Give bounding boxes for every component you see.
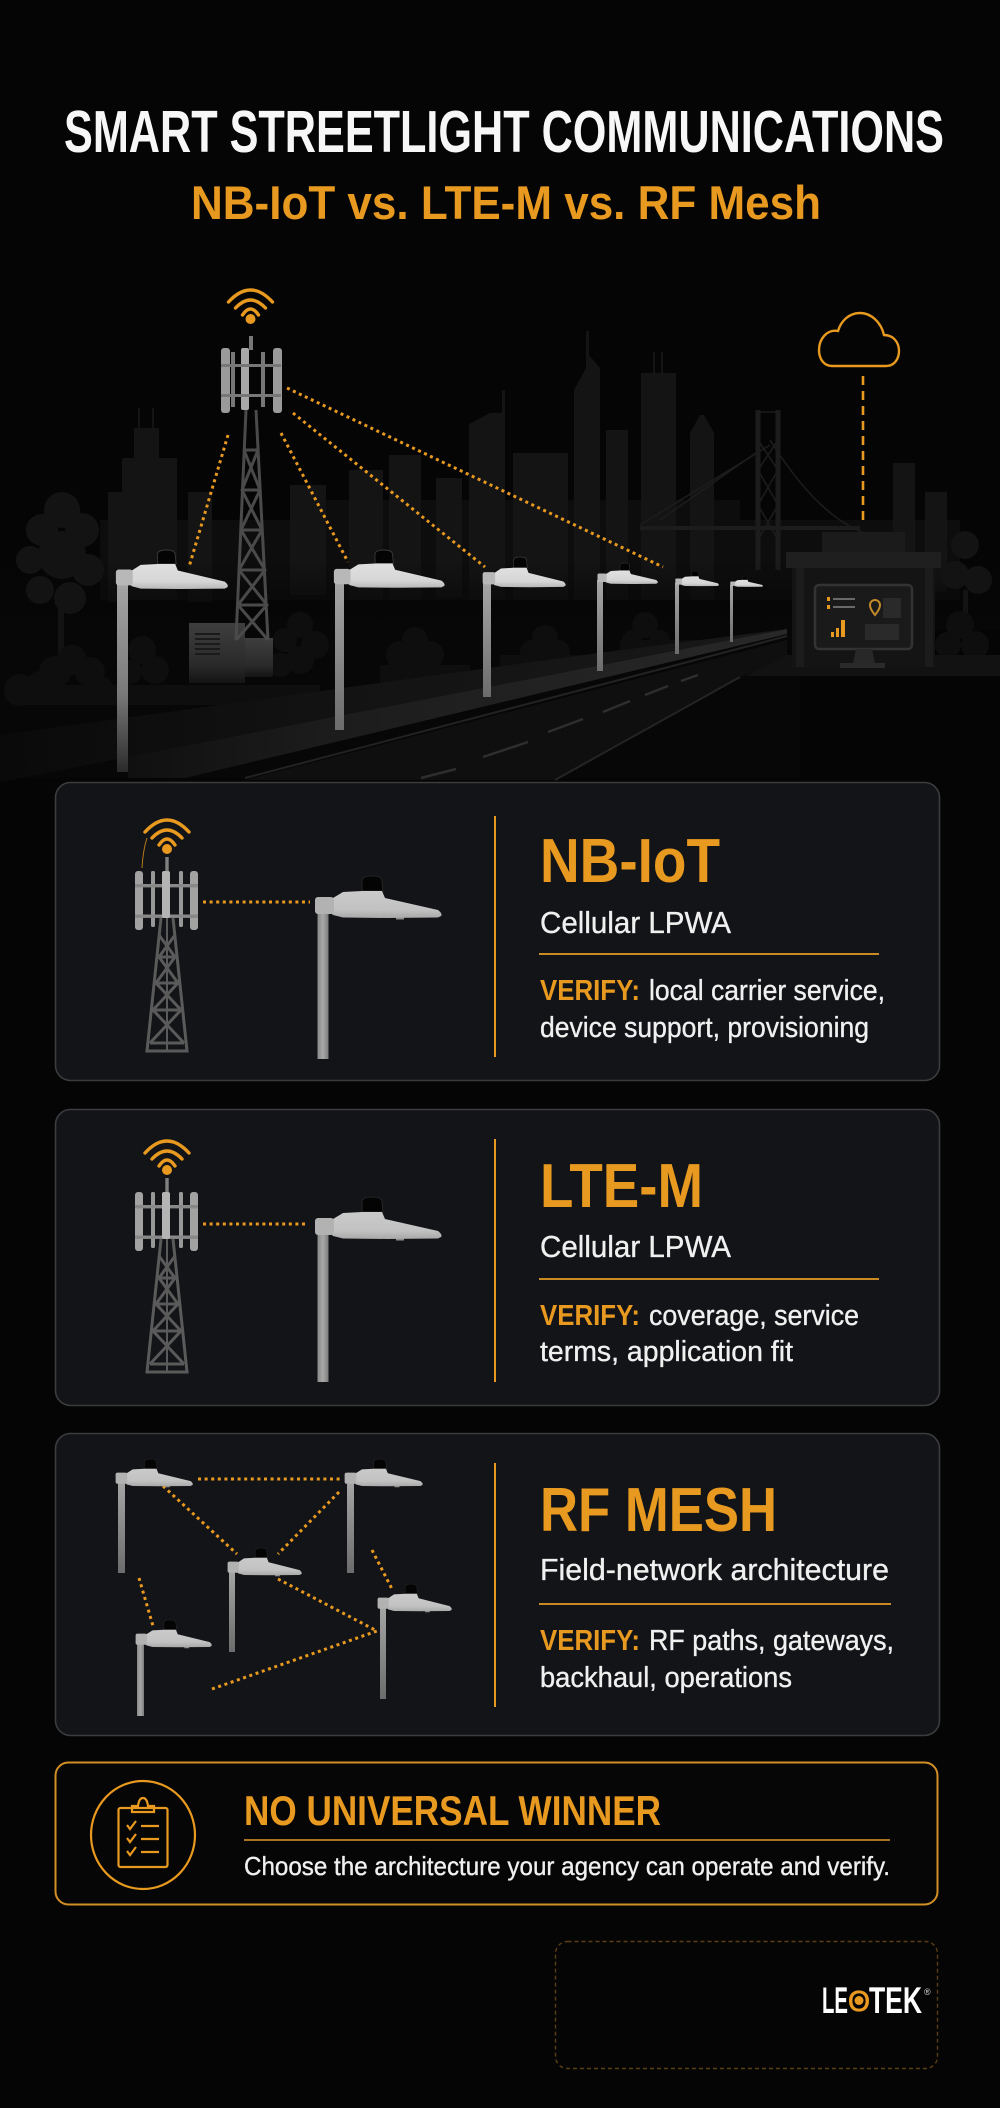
- panel: RF Mesh: [56, 1434, 940, 1736]
- dotted link: [203, 1222, 308, 1226]
- heading: RF MESH: [540, 1476, 777, 1545]
- callout text: Choose the architecture your agency can operate and verify.: [244, 1851, 890, 1881]
- icon: cloud: [819, 313, 899, 366]
- subheading: Cellular LPWA: [540, 1229, 731, 1264]
- verify note: device support, provisioning: [540, 1012, 869, 1044]
- cell tower: [221, 290, 282, 640]
- verify note: local carrier service,: [649, 975, 885, 1007]
- road and sidewalk: [0, 629, 1000, 782]
- street light: [315, 1197, 442, 1382]
- city skyline: [100, 331, 960, 602]
- subheading: Field-network architecture: [540, 1552, 889, 1587]
- verify note: terms, application fit: [540, 1336, 793, 1368]
- callout heading: NO UNIVERSAL WINNER: [244, 1787, 661, 1834]
- icon: tower with wifi: [135, 1141, 198, 1372]
- street light row: [116, 550, 763, 772]
- suspension bridge: [640, 410, 870, 570]
- roadside bushes: [4, 611, 989, 706]
- logo: Leotek: O: [848, 1986, 870, 2018]
- heading: NB-IoT: [540, 827, 720, 896]
- callout: no universal winner: [56, 1762, 938, 1904]
- subtitle: NB-IoT vs. LTE-M vs. RF Mesh: [191, 176, 821, 229]
- dashboard monitor: [815, 585, 912, 668]
- dotted link: [203, 900, 310, 904]
- dashed link from building to cloud: [862, 376, 864, 522]
- dashed logo box: [556, 1942, 938, 2068]
- network operations building: [786, 532, 941, 668]
- dotted mesh links: [139, 1479, 392, 1689]
- registered mark: ®: [924, 1987, 931, 1997]
- street light: [315, 876, 442, 1059]
- verify note: [540, 1625, 894, 1694]
- trees and bushes: [16, 492, 992, 660]
- logo: Leotek: [822, 1980, 922, 2021]
- icon: tower with wifi: [135, 820, 198, 1051]
- panel: NB-IoT: [56, 782, 940, 1080]
- verify note: [540, 1300, 859, 1368]
- dotted links from tower to lights: [189, 388, 663, 567]
- logo: Leotek: TEK: [869, 1980, 922, 2021]
- icon: clipboard checklist: [91, 1781, 195, 1889]
- heading: LTE-M: [540, 1152, 703, 1221]
- verify note: [540, 975, 885, 1044]
- verify note: backhaul, operations: [540, 1662, 792, 1694]
- hero illustration: connected street scene: [0, 290, 1000, 782]
- divider: [494, 1463, 496, 1707]
- verify note: RF paths, gateways,: [649, 1625, 894, 1657]
- subheading: Cellular LPWA: [540, 905, 731, 940]
- divider: [494, 816, 496, 1057]
- verify note: coverage, service: [649, 1300, 859, 1332]
- icon: wifi signal: [228, 290, 272, 324]
- mesh street lights: [116, 1459, 452, 1716]
- electrical cabinets: [189, 623, 273, 683]
- logo: Leotek: LE: [822, 1980, 848, 2021]
- verify note: VERIFY:: [540, 975, 640, 1007]
- panel: LTE-M: [56, 1110, 940, 1406]
- verify note: VERIFY:: [540, 1300, 640, 1332]
- verify note: VERIFY:: [540, 1625, 640, 1657]
- divider: [494, 1139, 496, 1382]
